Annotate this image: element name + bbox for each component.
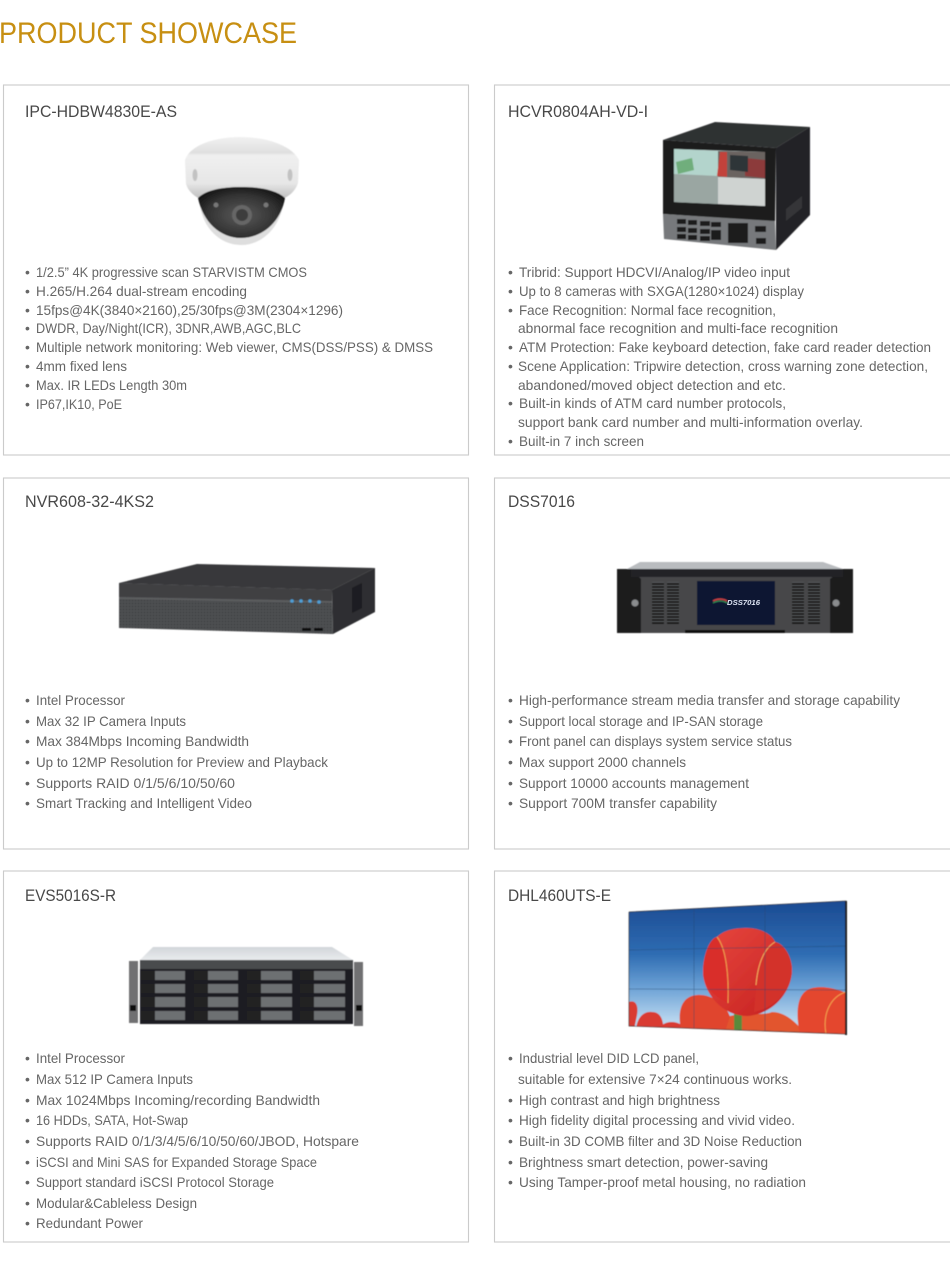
feature list: High fidelity digital processing and vivid video. [519,1112,795,1128]
feature list: Tribrid: Support HDCVI/Analog/IP video input [519,264,790,280]
feature list: • [25,713,30,729]
feature list: Max. IR LEDs Length 30m [36,377,187,393]
heading: HCVR0804AH-VD-I: HCVR0804AH-VD-I [508,102,648,121]
feature list: • [508,754,513,770]
screen logo: DSS7016 [727,600,760,607]
feature list [508,264,931,449]
feature list: • [25,1154,30,1170]
feature list: Max support 2000 channels [519,754,686,770]
feature list: • [25,396,30,412]
feature list: Supports RAID 0/1/3/4/5/6/10/50/60/JBOD, Hotspare [36,1133,359,1149]
feature list: Built-in kinds of ATM card number protocols, [519,395,786,411]
feature list: Multiple network monitoring: Web viewer, CMS(DSS/PSS) & DMSS [36,339,433,355]
feature list: • [508,713,513,729]
feature list: • [508,302,513,318]
feature list: • [25,377,30,393]
feature list: Up to 12MP Resolution for Preview and Playback [36,754,329,770]
feature list: Support local storage and IP-SAN storage [519,713,763,729]
heading: DSS7016: DSS7016 [508,492,575,511]
feature list: Modular&Cableless Design [36,1195,197,1211]
feature list: 16 HDDs, SATA, Hot-Swap [36,1112,188,1128]
feature list: • [508,1050,513,1066]
feature list: support bank card number and multi-information overlay. [518,414,863,430]
panel: DHL460UTS-E [494,871,950,1242]
feature list: 4mm fixed lens [36,358,127,374]
feature list: Redundant Power [36,1215,143,1231]
icon: ATM DVR with screen [663,122,810,250]
feature list [25,264,433,412]
small tulips left [629,1001,686,1030]
feature list: • [508,264,513,280]
feature list: Intel Processor [36,1050,125,1066]
feature list: • [25,1071,30,1087]
feature list: suitable for extensive 7×24 continuous works. [518,1071,792,1087]
feature list: • [508,1154,513,1170]
feature list: 1/2.5” 4K progressive scan STARVISTM CMOS [36,264,307,280]
feature list: • [25,264,30,280]
feature list: • [25,733,30,749]
feature list: Built-in 7 inch screen [519,433,644,449]
feature list: Max 384Mbps Incoming Bandwidth [36,733,249,749]
icon: dome camera [185,137,299,245]
heading: DHL460UTS-E: DHL460UTS-E [508,886,611,905]
icon: DSS server [617,562,853,633]
feature list: High contrast and high brightness [519,1092,720,1108]
feature list: • [508,433,513,449]
icon: NVR recorder [119,564,375,634]
panel: EVS5016S-R [4,871,468,1242]
feature list: • [25,320,30,336]
feature list [25,692,329,811]
feature list: Built-in 3D COMB filter and 3D Noise Reduction [519,1133,802,1149]
title: PRODUCT SHOWCASE [0,17,297,50]
feature list: • [25,1174,30,1190]
feature list: Supports RAID 0/1/5/6/10/50/60 [36,775,235,791]
feature list: Using Tamper-proof metal housing, no radiation [519,1174,806,1190]
feature list: • [25,754,30,770]
feature list: abnormal face recognition and multi-face recognition [518,320,838,336]
feature list: • [25,302,30,318]
panel: NVR608-32-4KS2 [4,478,468,849]
lower middle tulip [680,995,736,1030]
stem [734,1012,742,1032]
feature list: Brightness smart detection, power-saving [519,1154,768,1170]
feature list: Up to 8 cameras with SXGA(1280×1024) display [519,283,804,299]
feature list: Max 32 IP Camera Inputs [36,713,186,729]
icon: video wall with tulip [629,900,847,1040]
feature list: • [25,1050,30,1066]
feature list: • [25,1112,30,1128]
feature list: • [508,1133,513,1149]
feature list: DWDR, Day/Night(ICR), 3DNR,AWB,AGC,BLC [36,320,301,336]
feature list: • [508,733,513,749]
feature list: iSCSI and Mini SAS for Expanded Storage Space [36,1154,317,1170]
feature list: • [508,692,513,708]
feature list: • [25,1133,30,1149]
feature list: Intel Processor [36,692,125,708]
feature list: • [25,339,30,355]
feature list: ATM Protection: Fake keyboard detection, fake card reader detection [519,339,931,355]
heading: NVR608-32-4KS2: NVR608-32-4KS2 [25,492,154,511]
feature list: • [508,283,513,299]
feature list: • [508,339,513,355]
feature list [25,1050,359,1231]
feature list: Max 1024Mbps Incoming/recording Bandwidth [36,1092,320,1108]
keypad [677,219,766,244]
feature list: Smart Tracking and Intelligent Video [36,795,252,811]
feature list: Industrial level DID LCD panel, [519,1050,699,1066]
lower right tulip [798,987,846,1040]
heading: EVS5016S-R: EVS5016S-R [25,886,116,905]
main tulip [703,928,792,1016]
icon: EVS storage server [129,947,363,1026]
feature list: • [508,358,513,374]
feature list: • [25,692,30,708]
feature list: • [25,358,30,374]
feature list [508,692,900,811]
feature list: • [508,795,513,811]
feature list: • [508,1174,513,1190]
feature list: • [508,1092,513,1108]
feature list: Front panel can displays system service status [519,733,792,749]
feature list: Support standard iSCSI Protocol Storage [36,1174,274,1190]
feature list: • [25,1092,30,1108]
feature list: Support 10000 accounts management [519,775,749,791]
feature list: • [508,395,513,411]
feature list: Support 700M transfer capability [519,795,717,811]
feature list: 15fps@4K(3840×2160),25/30fps@3M(2304×1296) [36,302,343,318]
feature list: Face Recognition: Normal face recognition, [519,302,776,318]
feature list: Max 512 IP Camera Inputs [36,1071,193,1087]
feature list: Scene Application: Tripwire detection, cross warning zone detection, [518,358,928,374]
feature list [508,1050,806,1190]
feature list: H.265/H.264 dual-stream encoding [36,283,247,299]
feature list: IP67,IK10, PoE [36,396,122,412]
panel: IPC-HDBW4830E-AS [4,85,468,455]
feature list: • [25,283,30,299]
feature list: • [25,775,30,791]
feature list: High-performance stream media transfer and storage capability [519,692,900,708]
feature list: • [25,1215,30,1231]
feature list: • [25,1195,30,1211]
heading: IPC-HDBW4830E-AS: IPC-HDBW4830E-AS [25,102,177,121]
feature list: • [508,1112,513,1128]
feature list: • [508,775,513,791]
panel: HCVR0804AH-VD-I [494,85,950,455]
feature list: • [25,795,30,811]
feature list: abandoned/moved object detection and etc. [518,377,786,393]
panel: DSS7016 [494,478,950,849]
